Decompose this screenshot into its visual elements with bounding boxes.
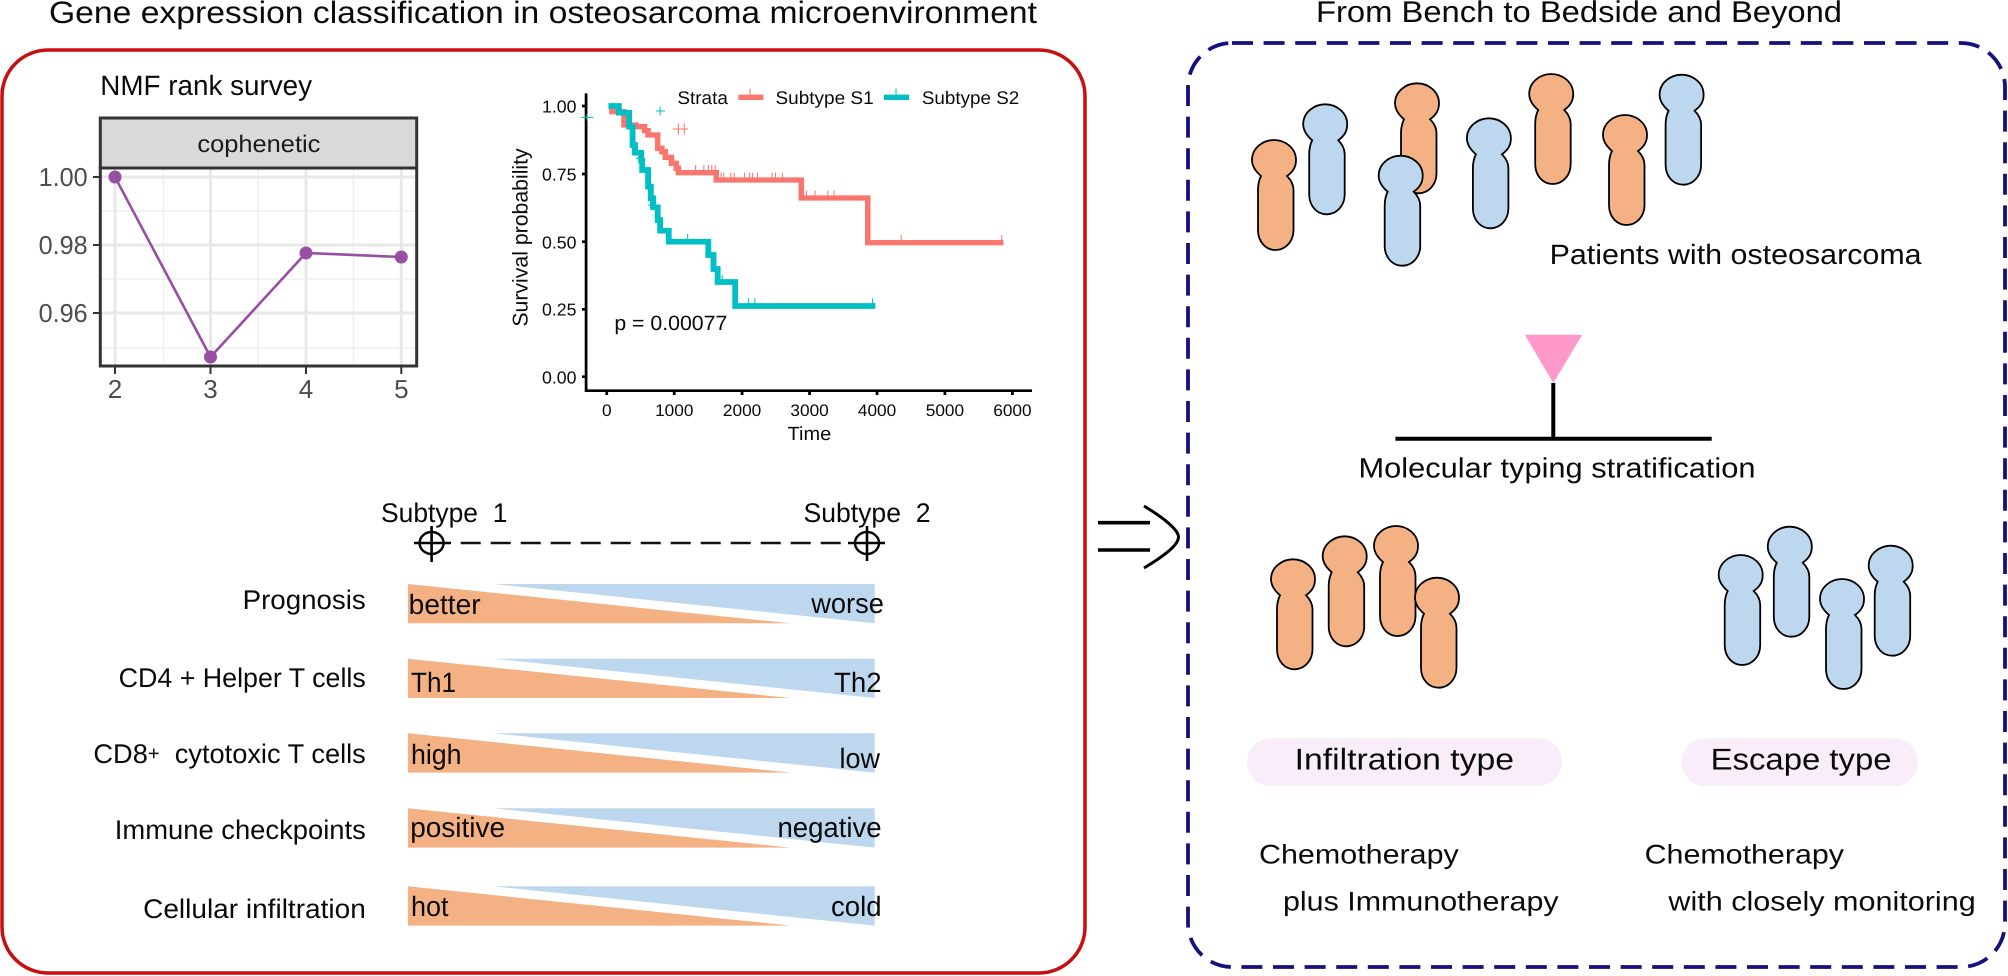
row: CD4 helper T cells: CD4 + Helper T cells	[119, 663, 366, 693]
panel: bench to bedside	[1188, 43, 2005, 967]
pill: escape type: Escape type	[1711, 743, 1892, 776]
row: CD8 cytotoxic T cells	[93, 733, 881, 774]
x axis tick labels: 2000	[723, 401, 761, 420]
escape group chromosomes	[1719, 527, 1913, 689]
axis ticks and labels: 4	[299, 374, 313, 404]
axis ticks and labels: 0.98	[39, 230, 88, 260]
x axis tick labels: 5000	[926, 401, 964, 420]
arrow: implies	[1098, 506, 1178, 568]
label: Subtype 2: Subtype 2	[804, 498, 930, 528]
row: CD8 cytotoxic T cells: low	[840, 743, 881, 774]
row: CD8 cytotoxic T cells: cytotoxic T cells	[160, 739, 366, 769]
curve: subtype S1	[608, 107, 1003, 243]
axis ticks and labels	[39, 162, 409, 404]
row: Prognosis: better	[409, 589, 481, 620]
row: CD4 helper T cells: Th2	[834, 667, 882, 698]
panel: gene expression classification	[2, 50, 1085, 973]
row: Immune checkpoints	[115, 808, 882, 848]
label: Subtype 1: Subtype 1	[381, 498, 507, 528]
y axis tick labels: 0.00	[542, 368, 576, 388]
infiltration group chromosomes	[1271, 526, 1459, 688]
row: Prognosis	[243, 584, 884, 623]
y axis tick labels: 0.25	[542, 300, 576, 320]
subtype comparison axis	[381, 498, 930, 562]
facet strip: cophenetic: cophenetic	[197, 131, 320, 158]
icon: target right	[848, 526, 885, 561]
pill: infiltration type	[1247, 738, 1562, 786]
label: patients with osteosarcoma: Patients with osteosarcoma	[1550, 239, 1922, 270]
x axis tick labels: 6000	[993, 401, 1032, 420]
icon: target left	[414, 526, 451, 562]
text: infiltration treatment	[1259, 839, 1559, 917]
x axis tick labels: 1000	[655, 401, 693, 420]
legend: Strata	[677, 87, 728, 108]
x axis tick labels: 3000	[790, 401, 829, 420]
y axis title: Survival probability	[509, 148, 532, 327]
plot area with grid	[100, 168, 417, 366]
y axis tick labels: 1.00	[542, 97, 576, 117]
row: Immune checkpoints: Immune checkpoints	[115, 815, 366, 845]
row: Immune checkpoints: positive	[410, 812, 505, 843]
axis ticks and labels: 5	[394, 374, 409, 404]
x axis tick labels: 0	[602, 401, 612, 420]
p value: p = 0.00077	[614, 312, 727, 335]
facet strip: cophenetic	[100, 118, 417, 168]
pill: infiltration type: Infiltration type	[1295, 743, 1514, 776]
y axis tick labels: 0.75	[542, 165, 576, 184]
pill: escape type	[1682, 738, 1918, 786]
axis ticks and labels: 0.96	[39, 298, 88, 328]
axis ticks and labels: 2	[108, 374, 122, 404]
row: Prognosis: worse	[810, 588, 884, 619]
y axis tick labels: 0.50	[542, 233, 576, 252]
row: CD4 helper T cells	[119, 659, 882, 698]
data line and points	[108, 170, 408, 364]
x axis tick labels	[602, 401, 1032, 420]
icon: stratification funnel	[1395, 335, 1712, 439]
legend: Subtype S1	[775, 87, 874, 108]
text: escape treatment: with closely monitoring	[1667, 887, 1976, 917]
text: escape treatment: Chemotherapy	[1645, 839, 1845, 869]
text: infiltration treatment: plus Immunotherapy	[1283, 887, 1559, 917]
chart: NMF rank survey	[39, 70, 417, 404]
row: CD4 helper T cells: Th1	[411, 667, 456, 698]
text: infiltration treatment: Chemotherapy	[1259, 839, 1459, 869]
axes	[582, 93, 1032, 395]
chart: Kaplan-Meier survival curves	[509, 87, 1032, 444]
dashed connector	[461, 542, 843, 544]
label: molecular typing stratification: Molecular typing stratification	[1358, 453, 1756, 484]
row: Cellular infiltration: Cellular infiltration	[143, 894, 366, 924]
x axis tick labels: 4000	[858, 401, 896, 420]
row: Cellular infiltration	[143, 886, 882, 926]
axis ticks and labels: 1.00	[39, 162, 88, 192]
y axis tick labels	[542, 97, 576, 388]
chart heading: NMF rank survey	[100, 70, 312, 101]
patients group chromosomes	[1252, 74, 1704, 266]
row: Cellular infiltration: hot	[411, 891, 449, 922]
axis ticks and labels: 3	[203, 374, 218, 404]
row: CD8 cytotoxic T cells: CD8	[93, 739, 147, 769]
row: Immune checkpoints: negative	[778, 812, 882, 843]
curve: subtype S2	[581, 106, 875, 306]
x axis title: Time	[788, 423, 831, 444]
text: escape treatment	[1645, 839, 1976, 917]
legend: Subtype S2	[922, 87, 1019, 108]
row: Cellular infiltration: cold	[831, 891, 882, 922]
row: CD8 cytotoxic T cells: +	[148, 743, 160, 765]
legend	[677, 87, 1019, 108]
row: CD8 cytotoxic T cells: high	[411, 739, 462, 770]
row: Prognosis: Prognosis	[243, 585, 366, 615]
